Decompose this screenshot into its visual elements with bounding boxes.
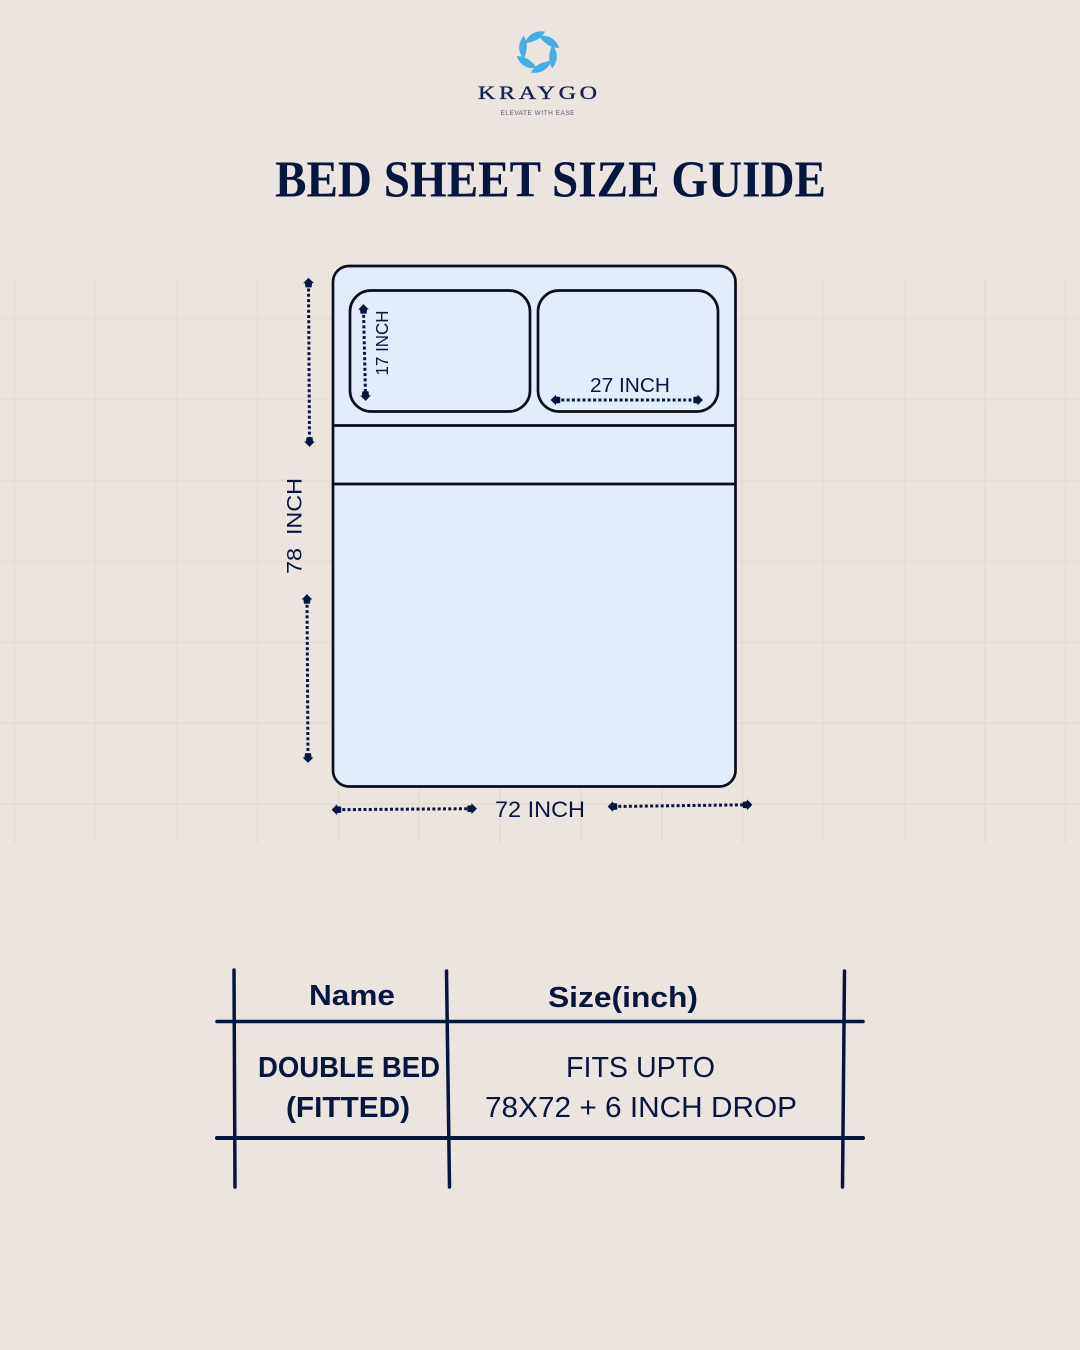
- label: 72 INCH: 72 INCH: [495, 797, 585, 822]
- label: 17 INCH: 17 INCH: [372, 310, 392, 376]
- logo: [478, 30, 597, 117]
- bed diagram: [284, 266, 747, 822]
- left pillow: [350, 290, 530, 412]
- size table: [217, 970, 863, 1187]
- cell: double bed fitted: DOUBLE BED: [258, 1052, 440, 1084]
- arrow: width left: [337, 809, 472, 810]
- label: 27 INCH: 27 INCH: [590, 375, 670, 397]
- cell: double bed fitted: (FITTED): [286, 1092, 410, 1124]
- arrow: length lower: [307, 600, 308, 758]
- arrow: pillow height: [364, 310, 366, 396]
- arrow: width right: [613, 805, 747, 806]
- right pillow: [538, 290, 718, 412]
- cell: size: 78X72 + 6 INCH DROP: [485, 1092, 797, 1124]
- icon: ring of blue leaves: [513, 30, 563, 74]
- arrow: pillow width: [556, 398, 698, 402]
- logo tagline: ELEVATE WITH EASE: [500, 110, 575, 117]
- header: Size(inch): Size(inch): [548, 982, 698, 1014]
- bed outline: [333, 266, 736, 786]
- logo wordmark: KRAYGO: [478, 83, 597, 103]
- header: Name: Name: [309, 980, 395, 1012]
- title: BED SHEET SIZE GUIDE: [275, 152, 826, 208]
- arrow: length upper: [308, 283, 310, 442]
- sheet fold lines: [333, 426, 736, 484]
- cell: size: FITS UPTO: [566, 1052, 715, 1084]
- table grid lines: [217, 970, 863, 1187]
- cell: double bed fitted: [258, 1052, 440, 1124]
- label: 78 INCH: 78 INCH: [284, 478, 306, 574]
- cell: size: [485, 1052, 797, 1124]
